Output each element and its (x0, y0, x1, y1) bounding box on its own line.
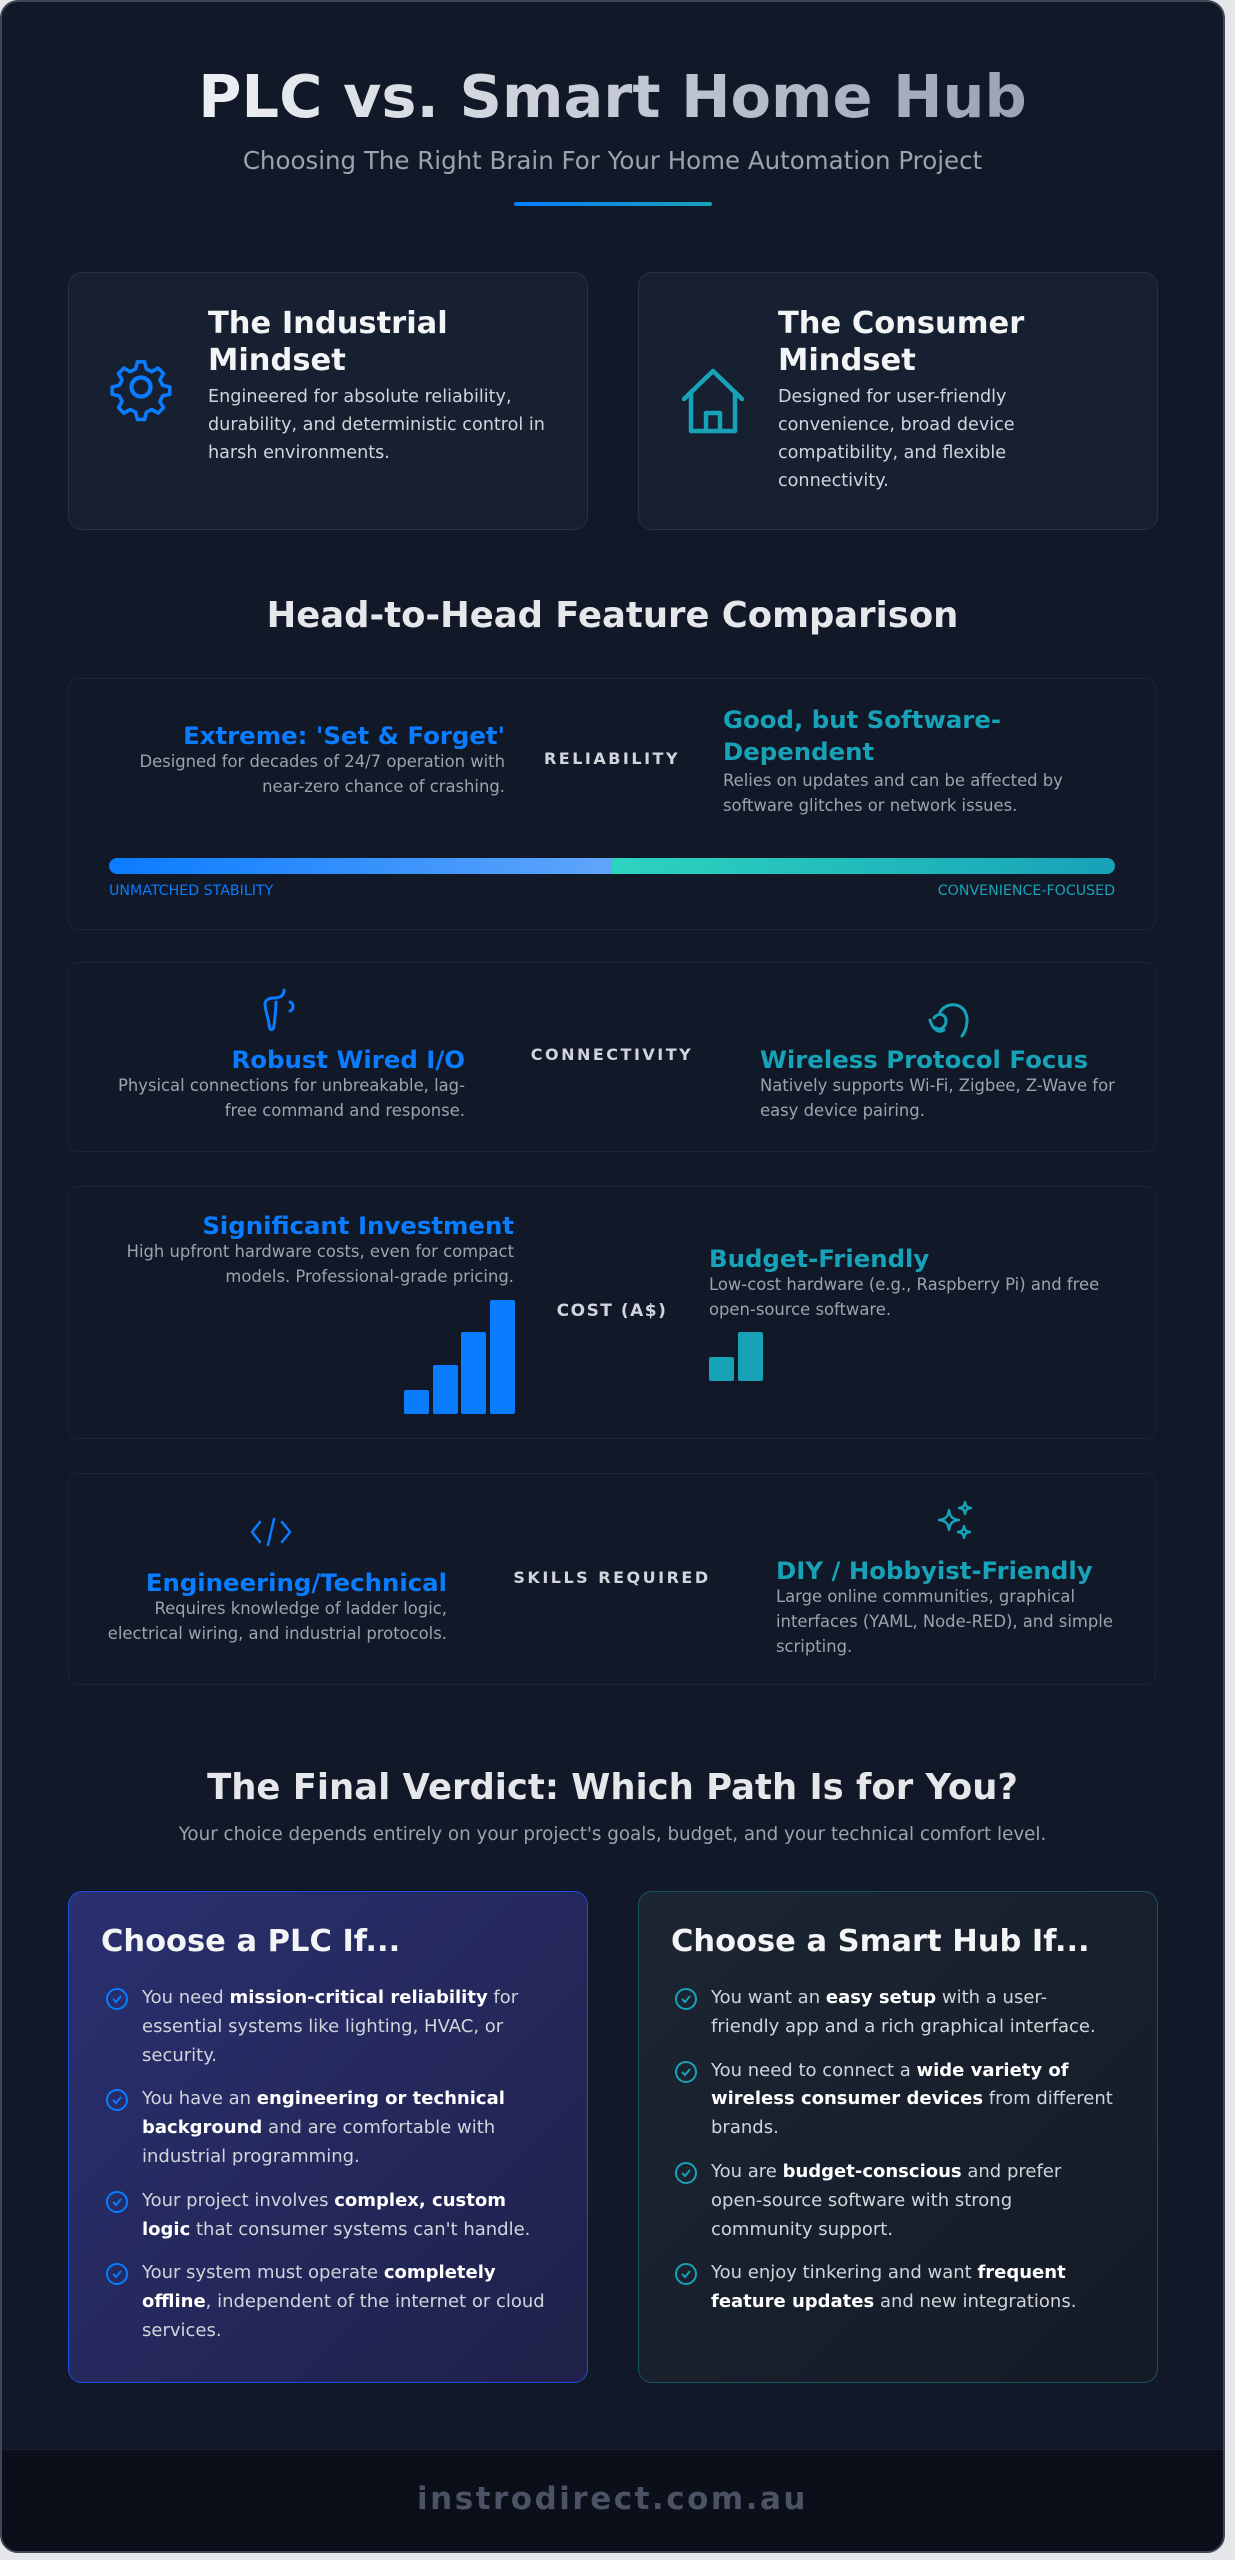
cost right: Low-cost hardware (e.g., Raspberry Pi) and free open-source software. (709, 1275, 1099, 1319)
cost right: Budget-Friendly (709, 1244, 929, 1273)
connectivity right: Wireless Protocol Focus (760, 1045, 1088, 1074)
skills left: Engineering/Technical (146, 1568, 447, 1597)
card title: The Industrial Mindset (208, 306, 448, 378)
reliability right: Good, but Software-Dependent (723, 705, 1001, 766)
skills right: Large online communities, graphical interfaces (YAML, Node-RED), and simple scripting. (776, 1587, 1113, 1656)
panel: choose PLC (68, 1891, 588, 2383)
panel: skills (68, 1473, 1156, 1685)
icon: wireless (928, 1003, 969, 1038)
icon: plug (264, 988, 294, 1032)
icon: code (250, 1518, 292, 1546)
card: industrial mindset (68, 272, 588, 530)
checklist: You need mission-critical reliability for essential systems like lighting, HVAC, or security. (142, 1987, 518, 2066)
chart: high cost bars (404, 1300, 515, 1414)
chart: low cost bars (709, 1332, 763, 1381)
reliability right: Relies on updates and can be affected by software glitches or network issues. (723, 771, 1063, 815)
panel: choose smart hub (638, 1891, 1158, 2383)
connectivity left: Robust Wired I/O (231, 1045, 465, 1074)
heading: comparison: Head-to-Head Feature Comparison (267, 595, 958, 636)
cost right (709, 1244, 1099, 1319)
cost left: Significant Investment (202, 1211, 514, 1240)
checklist: You are budget-conscious and prefer open-source software with strong community support. (711, 2161, 1061, 2240)
subtitle: Choosing The Right Brain For Your Home Automation Project (243, 146, 982, 175)
connectivity left: Physical connections for unbreakable, lag-free command and response. (118, 1076, 465, 1120)
reliability right (723, 705, 1063, 815)
reliability left (139, 721, 505, 796)
checklist: You want an easy setup with a user-friendly app and a rich graphical interface. (711, 1987, 1096, 2037)
icon: house (682, 368, 744, 434)
reliability left: Designed for decades of 24/7 operation with near-zero chance of crashing. (139, 752, 505, 796)
checklist (106, 1987, 545, 2341)
bar label left: UNMATCHED STABILITY (109, 883, 273, 899)
label: connectivity: CONNECTIVITY (531, 1045, 693, 1064)
checklist: Your system must operate completely offline, independent of the internet or cloud services. (142, 2262, 545, 2341)
label: skills: SKILLS REQUIRED (513, 1568, 711, 1587)
title: PLC vs. Smart Home Hub (198, 62, 1027, 131)
reliability bar (109, 858, 1115, 874)
panel: connectivity (68, 962, 1156, 1152)
reliability left: Extreme: 'Set & Forget' (183, 721, 505, 750)
card title: The Consumer Mindset (778, 306, 1024, 378)
icon: sparkles (938, 1500, 972, 1540)
skills right (776, 1556, 1113, 1656)
label: reliability: RELIABILITY (544, 749, 680, 768)
bar label right: CONVENIENCE-FOCUSED (938, 883, 1115, 899)
skills right: DIY / Hobbyist-Friendly (776, 1556, 1093, 1585)
checklist: Your project involves complex, custom logic that consumer systems can't handle. (142, 2190, 530, 2240)
skills left (108, 1568, 447, 1643)
icon: gear (110, 360, 172, 422)
label: cost: COST (A$) (557, 1301, 667, 1321)
title: Choose a Smart Hub If... (671, 1924, 1090, 1959)
panel: reliability (68, 678, 1156, 930)
connectivity right: Natively supports Wi-Fi, Zigbee, Z-Wave for easy device pairing. (760, 1076, 1115, 1120)
connectivity right (760, 1045, 1115, 1120)
verdict subtitle: Your choice depends entirely on your project's goals, budget, and your technical comfort level. (179, 1824, 1046, 1845)
panel: cost (68, 1186, 1156, 1439)
title: Choose a PLC If... (101, 1924, 400, 1959)
card text: Designed for user-friendly convenience, broad device compatibility, and flexible connectivity. (778, 387, 1015, 491)
cost left (127, 1211, 514, 1286)
cost left: High upfront hardware costs, even for compact models. Professional-grade pricing. (127, 1242, 514, 1286)
heading: verdict: The Final Verdict: Which Path Is for You? (207, 1767, 1018, 1808)
skills left: Requires knowledge of ladder logic, electrical wiring, and industrial protocols. (108, 1599, 447, 1643)
connectivity left (118, 1045, 465, 1120)
checklist (675, 1987, 1113, 2312)
footer text: instrodirect.com.au (417, 2481, 808, 2517)
checklist: You have an engineering or technical background and are comfortable with industrial programming. (142, 2088, 505, 2167)
checklist: You enjoy tinkering and want frequent feature updates and new integrations. (711, 2262, 1076, 2312)
footer (2, 2449, 1223, 2551)
card text: Engineered for absolute reliability, durability, and deterministic control in harsh environments. (208, 387, 545, 463)
checklist: You need to connect a wide variety of wireless consumer devices from different brands. (711, 2060, 1113, 2138)
accent line (514, 202, 712, 206)
card: consumer mindset (638, 272, 1158, 530)
